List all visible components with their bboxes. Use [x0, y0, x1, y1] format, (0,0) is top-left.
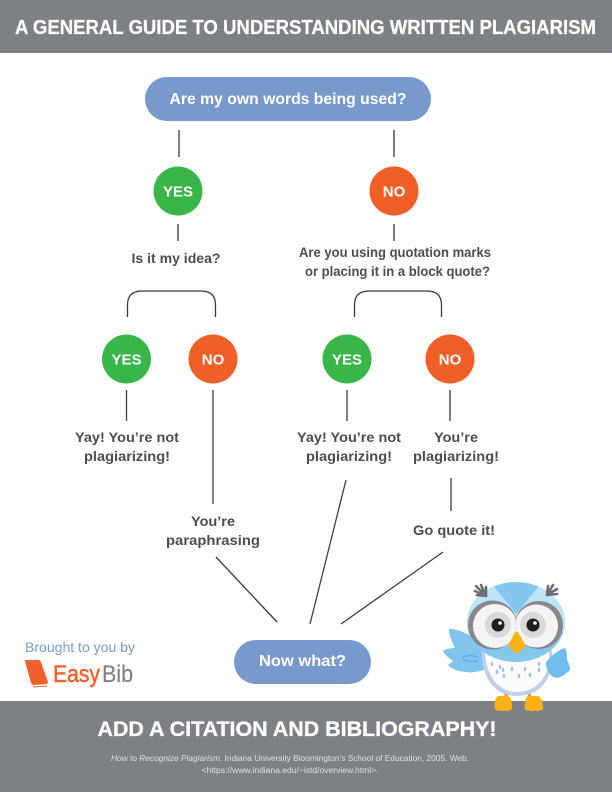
NO circle: quotation: NO: [439, 352, 462, 368]
EasyBib logo: Bib: [102, 661, 133, 688]
NO circle: quotation: [426, 334, 474, 384]
EasyBib logo: [25, 660, 133, 688]
now what pill: Now what?: [259, 653, 346, 670]
bracket right: [354, 291, 442, 317]
head: [467, 582, 565, 662]
NO circle: my idea: [188, 334, 238, 384]
YES circle: my idea: YES: [111, 352, 142, 368]
icon: book: [25, 660, 48, 687]
header band: [0, 0, 612, 53]
question: quotation marks: [299, 244, 491, 279]
left foot: [495, 696, 512, 711]
EasyBib logo: Easy: [53, 661, 100, 688]
citation: How to Recognize Plagiarism. Indiana University Bloomington’s School of Education, 2005. Web.: [111, 754, 469, 763]
right foot: [525, 696, 543, 711]
footer band: [0, 701, 612, 792]
YES circle: own words: [154, 166, 202, 216]
wing curl: [463, 656, 478, 661]
left wing: [443, 629, 490, 672]
body: [482, 650, 552, 696]
connector lines top: [178, 130, 394, 241]
now what pill: [234, 640, 371, 684]
outcome: not plagiarizing right: [297, 429, 401, 464]
start question pill: [145, 77, 431, 121]
outcome: you're plagiarizing: You’re: [434, 429, 478, 445]
YES circle: my idea: [102, 334, 151, 384]
footer band: <https://www.indiana.edu/~istd/overview.html>.: [202, 766, 378, 775]
outcome: not plagiarizing right: Yay! You’re not: [297, 429, 401, 445]
connector lines middle: [126, 390, 451, 511]
outcome: you're paraphrasing: [166, 513, 260, 548]
outcome: not plagiarizing left: plagiarizing!: [84, 448, 170, 464]
arrows to now what: [216, 480, 443, 624]
NO circle: own words: NO: [383, 184, 406, 200]
outcome: you're plagiarizing: plagiarizing!: [413, 448, 499, 464]
question: quotation marks: or placing it in a block quote?: [305, 263, 490, 279]
right wing: [546, 648, 570, 678]
outcome: you're paraphrasing: You’re: [191, 513, 235, 529]
right lashes: [547, 585, 557, 595]
left eye: [468, 600, 517, 650]
outcome: you're plagiarizing: [413, 429, 499, 464]
beak: [508, 632, 526, 654]
question: quotation marks: Are you using quotation marks: [299, 244, 491, 260]
brought to you by: Brought to you by: [25, 639, 135, 655]
owl mascot: [443, 580, 570, 711]
legs: [505, 692, 530, 697]
action: go quote it: Go quote it!: [413, 522, 495, 538]
left lashes: [475, 585, 486, 596]
outcome: not plagiarizing left: Yay! You’re not: [75, 429, 179, 445]
NO circle: my idea: NO: [202, 352, 225, 368]
YES circle: quotation: YES: [332, 352, 362, 368]
outcome: not plagiarizing right: plagiarizing!: [306, 448, 392, 464]
right eye: [515, 601, 563, 649]
YES circle: quotation: [322, 334, 372, 384]
YES circle: own words: YES: [163, 184, 193, 200]
outcome: not plagiarizing left: [75, 429, 179, 464]
question: is it my idea: Is it my idea?: [132, 250, 220, 266]
footer heading: ADD A CITATION AND BIBLIOGRAPHY!: [98, 718, 496, 741]
NO circle: own words: [370, 166, 418, 216]
belly feathers: [491, 662, 540, 678]
outcome: you're paraphrasing: paraphrasing: [166, 532, 260, 548]
bracket left: [128, 291, 216, 317]
start question pill: Are my own words being used?: [170, 91, 406, 108]
